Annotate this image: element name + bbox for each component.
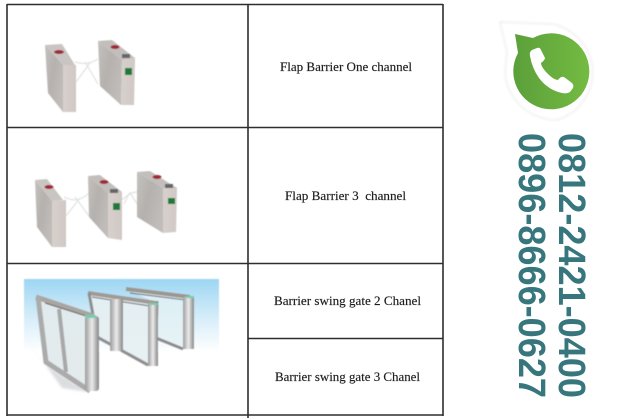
image: flap barrier one channel (45, 40, 135, 112)
flap wings (64, 192, 138, 216)
text: flap barrier three channel: Flap Barrier 3 channel (285, 189, 407, 203)
image: flap barrier three channel (35, 171, 177, 247)
post 1 (35, 179, 66, 247)
right flap post (98, 40, 135, 105)
middle gate (88, 293, 158, 366)
text: barrier swing gate 3 chanel: Barrier swing gate 3 Chanel (275, 370, 421, 384)
handset (530, 48, 573, 93)
text: flap barrier one channel: Flap Barrier One channel (280, 60, 413, 74)
floor shadow (26, 338, 88, 392)
flap wings (75, 59, 98, 84)
post 3 (137, 171, 177, 233)
phone number 2: 0896-8666-0627 (510, 133, 552, 398)
sky background (24, 279, 219, 352)
table grid (7, 4, 443, 418)
front gate (36, 297, 99, 392)
phone number 1: 0812-2421-0400 (550, 133, 592, 398)
left flap post (45, 44, 76, 112)
text: barrier swing gate 2 chanel: Barrier swing gate 2 Chanel (274, 294, 422, 308)
back gate (126, 289, 194, 349)
sticker outline (500, 22, 593, 120)
green bubble (513, 33, 589, 109)
post 2 (88, 175, 122, 240)
icon: whatsapp phone (500, 22, 593, 120)
image: swing gate barriers (24, 279, 219, 392)
